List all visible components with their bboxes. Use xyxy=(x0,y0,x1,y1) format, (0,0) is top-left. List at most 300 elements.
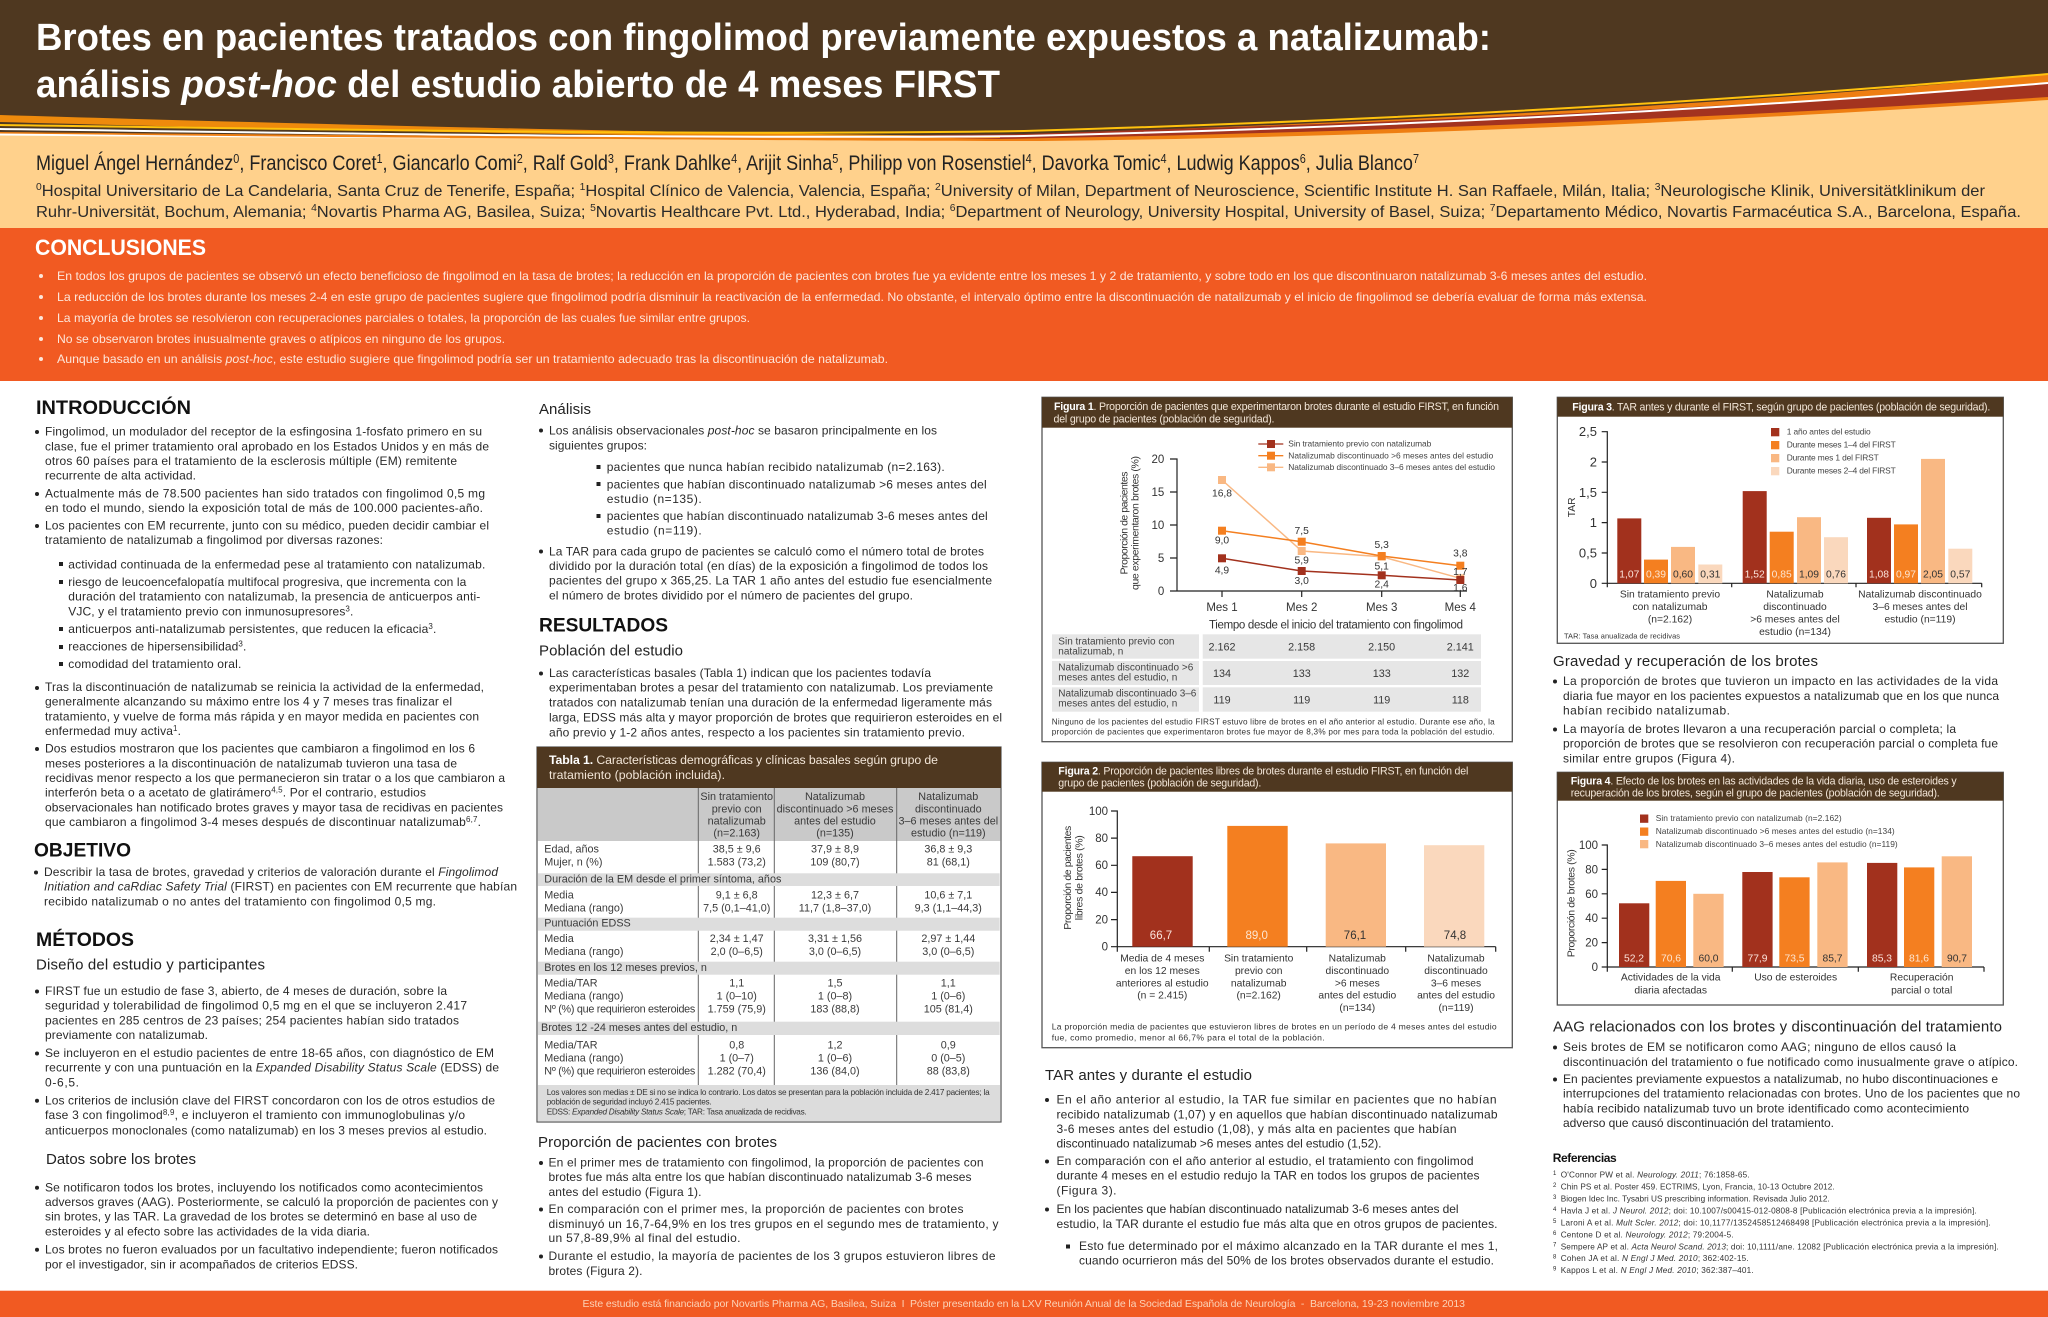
table 1 values: 183 (88,8) xyxy=(810,1004,860,1016)
references list: 5 xyxy=(1553,1219,1557,1225)
figure 3 bars: 1,52 xyxy=(1745,569,1765,580)
table 1 values: 0,8 xyxy=(729,1040,744,1052)
figure 1 footnote: proporción de pacientes que experimentaron brotes fue mayor de 8,3% por mes para toda la población del estudio. xyxy=(1052,728,1495,737)
figure 4 bars xyxy=(1619,856,1972,967)
table 1 row labels xyxy=(544,844,696,1078)
proporción text: brotes fue más alta entre los que habían discontinuado natalizumab 3-6 meses xyxy=(548,1170,972,1184)
table 1 section bands xyxy=(538,873,1000,1035)
diseño text: pacientes en 285 centros de 23 países; 254 pacientes habían sido tratados xyxy=(45,1013,459,1027)
figure 2 bars: 66,7 xyxy=(1150,930,1172,942)
figure 3 axes: 2,5 xyxy=(1579,424,1597,439)
table 1 row labels: Mediana (rango) xyxy=(544,1053,624,1065)
figure 1 patient table: 119 xyxy=(1373,694,1390,706)
datos text: Los brotes no fueron evaluados por un facultativo independiente; fueron notificados xyxy=(45,1242,498,1256)
table 1 values: 10,6 ± 7,1 xyxy=(924,889,972,901)
introducción text: recurrente de alta actividad. xyxy=(45,469,196,483)
figure 2 category labels: Media de 4 meses xyxy=(1120,953,1204,964)
panel: resultados, población del estudio xyxy=(539,614,1002,739)
data labels: 16,8 xyxy=(1212,489,1232,500)
conclusiones heading: CONCLUSIONES xyxy=(35,235,206,260)
figure 3 bars: 1,08 xyxy=(1869,569,1889,580)
references list xyxy=(1553,1171,1999,1275)
table 1 footnote: Los valores son medias ± DE si no se indica lo contrario. Los datos se presentan para la población incluida de 2.417 pacientes; la xyxy=(547,1088,990,1097)
data labels: 2,4 xyxy=(1375,580,1389,591)
gravedad text: La proporción de brotes que tuvieron un impacto en las actividades de la vida xyxy=(1563,674,1998,688)
análisis text xyxy=(539,423,992,602)
introducción text: generalmente alcanzando su máximo entre los 4 y 7 meses tras finalizar el xyxy=(45,695,452,709)
figure 4 category labels: parcial o total xyxy=(1891,985,1952,996)
figure 3 bars: 0,97 xyxy=(1896,569,1916,580)
table 1 values: 38,5 ± 9,6 xyxy=(713,844,761,856)
references heading: Referencias xyxy=(1553,1151,1617,1165)
figure 4 bar chart xyxy=(1565,813,1984,996)
figure 1 patient table: meses antes del estudio, n xyxy=(1058,699,1177,710)
figure 3 panel xyxy=(1557,397,2003,643)
subheading: proporción: Proporción de pacientes con brotes xyxy=(538,1134,777,1151)
introducción text: tratamiento de natalizumab a fingolimod por diversas razones: xyxy=(45,533,383,547)
table 1 values: 1,1 xyxy=(941,978,956,990)
figure 4 bars: 60,0 xyxy=(1698,954,1719,965)
panel: gravedad y recuperación xyxy=(1553,653,1999,765)
table 1 values: 1 (0–7) xyxy=(720,1053,754,1065)
table 1 values: 11,7 (1,8–37,0) xyxy=(799,902,871,914)
figure 4 legend: Natalizumab discontinuado 3–6 meses antes del estudio (n=119) xyxy=(1656,839,1898,849)
diseño text: recurrente y con una puntuación en la Expanded Disability Status Scale (EDSS) de xyxy=(45,1061,499,1075)
figure 3 category labels: estudio (n=119) xyxy=(1884,614,1956,625)
figure 3 bars: 0,60 xyxy=(1673,569,1693,580)
figure 3 category labels: discontinuado xyxy=(1763,602,1827,613)
table 1 column headers: (n=2.163) xyxy=(713,828,760,840)
diseño text: fase 3 con fingolimod8,9, e incluyeron el tramiento con immunoglobulinas y/o xyxy=(45,1108,465,1122)
references list: 2 xyxy=(1553,1183,1557,1189)
heading: resultados: RESULTADOS xyxy=(539,614,668,636)
table 1 values: 136 (84,0) xyxy=(810,1066,860,1078)
datos text: esteroides y al efecto sobre las actividades de la vida diaria. xyxy=(45,1224,370,1238)
figure 3 legend: Durante meses 1–4 del FIRST xyxy=(1787,440,1896,450)
figure 4 title: Figura 4. Efecto de los brotes en las actividades de la vida diaria, uso de esteroides y xyxy=(1571,775,1957,787)
figure 1 patient table: 2.158 xyxy=(1288,642,1315,654)
figure 1 axes: Mes 2 xyxy=(1286,602,1317,614)
heading: objetivo: OBJETIVO xyxy=(34,840,131,862)
figure 1 patient table: Sin tratamiento previo con xyxy=(1058,636,1174,647)
figure 2 bar chart xyxy=(1062,806,1496,1014)
table 1 values: 1.583 (73,2) xyxy=(708,857,766,869)
figure 1 patient table: Natalizumab discontinuado >6 xyxy=(1058,663,1194,674)
figure 3 legend: 1 año antes del estudio xyxy=(1787,427,1871,437)
introducción text: en todo el mundo, siendo la exposición total de más de 100.000 pacientes-año. xyxy=(45,501,483,515)
table 1 column headers: Natalizumab xyxy=(918,791,978,803)
figure 4 category labels: diaria afectadas xyxy=(1634,985,1707,996)
aag text: discontinuación del tratamiento o fue notificado como inusualmente grave o atípico. xyxy=(1563,1055,2018,1069)
figure 3 bar chart xyxy=(1564,424,1982,640)
table 1 values: 0 (0–5) xyxy=(931,1053,965,1065)
población text: experimentaban brotes a pesar del tratamiento con natalizumab. Los previamente xyxy=(549,681,993,695)
table 1 values: 109 (80,7) xyxy=(810,857,860,869)
tar text: cuando ocurrieron más del 50% de los brotes observados durante el estudio. xyxy=(1079,1254,1494,1268)
figure 3 axes: 2 xyxy=(1590,454,1597,470)
introducción text: clase, fue el primer tratamiento oral aprobado en los Estados Unidos y en más de xyxy=(45,439,489,453)
table 1 values: 9,3 (1,1–44,3) xyxy=(915,902,982,914)
table 1 column headers: (n=135) xyxy=(816,828,854,840)
tar text: discontinuado natalizumab >6 meses antes del estudio (1,52). xyxy=(1056,1137,1382,1151)
figure 2 axes: libres de brotes (%) xyxy=(1073,835,1085,920)
diseño text: previamente con natalizumab. xyxy=(45,1028,208,1042)
datos text: sin brotes, y las TAR. La gravedad de los brotes se determinó en base al uso de xyxy=(45,1210,477,1224)
análisis text: pacientes que habían discontinuado natalizumab >6 meses antes del xyxy=(607,477,987,491)
table 1 row labels: Media xyxy=(544,933,574,945)
diseño text: FIRST fue un estudio de fase 3, abierto, de 4 meses de duración, sobre la xyxy=(45,984,447,998)
análisis text: pacientes que nunca habían recibido natalizumab (n=2.163). xyxy=(607,460,945,474)
table 1 values: 3,0 (0–6,5) xyxy=(922,946,974,958)
data labels: 3,0 xyxy=(1295,576,1309,587)
figure 1 panel xyxy=(1042,397,1512,742)
figure 1 footnote xyxy=(1052,717,1495,737)
figure 3 bars: 0,76 xyxy=(1826,569,1846,580)
figure 4 legend: Natalizumab discontinuado >6 meses antes del estudio (n=134) xyxy=(1656,826,1895,836)
análisis text: pacientes del grupo x 365,25. La TAR 1 año antes del estudio fue esencialmente xyxy=(549,574,992,588)
tar text: En el año anterior al estudio, la TAR fue similar en pacientes que no habían xyxy=(1056,1093,1496,1107)
diseño text: 0-6,5. xyxy=(45,1075,79,1089)
panel: introducción xyxy=(35,395,505,829)
table 1 values: 2,0 (0–6,5) xyxy=(711,946,763,958)
figure 2 bars: 74,8 xyxy=(1444,930,1466,942)
figure 2 category labels: en los 12 meses xyxy=(1125,966,1200,977)
references list: 6 xyxy=(1553,1231,1557,1237)
conclusiones bullet list: La mayoría de brotes se resolvieron con recuperaciones parciales o totales, la proporción de las cuales fue similar entre grupos. xyxy=(57,311,750,325)
introducción text: tratamiento, y vuelve de forma más rápida y en mayor medida en pacientes con xyxy=(45,709,479,723)
introducción text: reacciones de hipersensibilidad3. xyxy=(68,639,246,653)
figure 3 bars: 1,09 xyxy=(1799,569,1819,580)
table 1 values: 105 (81,4) xyxy=(924,1004,973,1016)
tar text: 3-6 meses antes del estudio (1,08), y más alta en pacientes que habían xyxy=(1056,1122,1456,1136)
table 1 column headers: 3–6 meses antes del xyxy=(898,816,998,828)
figure 2 bars: 89,0 xyxy=(1246,930,1268,942)
figure 3 bars: 0,57 xyxy=(1950,569,1971,580)
figure 2 category labels: natalizumab xyxy=(1231,978,1287,989)
figure 4 axes: Proporción de brotes (%) xyxy=(1565,849,1577,957)
figure 2 axes: 20 xyxy=(1095,914,1108,926)
figure 1 axes: Mes 3 xyxy=(1366,602,1397,614)
table 1 title: Tabla 1. Características demográficas y clínicas basales según grupo de xyxy=(549,753,938,767)
figure 4 category labels: Recuperación xyxy=(1890,973,1954,984)
población text: Las características basales (Tabla 1) indican que los pacientes todavía xyxy=(549,666,931,680)
table 1 values: 37,9 ± 8,9 xyxy=(811,844,859,856)
table 1 values: 88 (83,8) xyxy=(927,1066,970,1078)
table 1 title xyxy=(549,753,938,782)
análisis text: pacientes que habían discontinuado natalizumab 3-6 meses antes del xyxy=(607,509,988,523)
figure 2 title: Figura 2. Proporción de pacientes libres de brotes durante el estudio FIRST, en función del xyxy=(1058,765,1468,777)
table 1 values: 1.759 (75,9) xyxy=(708,1004,766,1016)
data labels: 5,3 xyxy=(1375,540,1389,551)
introducción text: que cambiaron a fingolimod 3-4 meses después de discontinuar natalizumab6,7. xyxy=(45,815,481,829)
figure 4 category labels: Uso de esteroides xyxy=(1754,973,1837,984)
análisis text: La TAR para cada grupo de pacientes se calculó como el número total de brotes xyxy=(549,544,984,558)
table 1 section bands: Brotes en los 12 meses previos, n xyxy=(544,962,707,974)
proporción text: antes del estudio (Figura 1). xyxy=(548,1185,702,1199)
datos text: por el investigador, sin ir acompañados de criterios EDSS. xyxy=(45,1257,358,1271)
conclusiones bullet list: Aunque basado en un análisis post-hoc, este estudio sugiere que fingolimod podría ser un tratamiento adecuado tras la discontinuación de natalizumab. xyxy=(57,352,888,366)
figure 3 axes: 0,5 xyxy=(1579,546,1597,560)
table 1 values: 1 (0–6) xyxy=(818,1053,852,1065)
table 1 row labels: Edad, años xyxy=(544,844,600,856)
introducción text: recidivas menor respecto a los que permanecieron sin tratar o a los que cambiaron a xyxy=(45,771,505,785)
title xyxy=(36,17,1491,106)
proporción text xyxy=(539,1156,998,1278)
figure 1 title xyxy=(1054,401,1499,425)
authors: Miguel Ángel Hernández0, Francisco Coret1, Giancarlo Comi2, Ralf Gold3, Frank Dahlke4, Arijit Sinha5, Philipp von Rosenstiel4, Davorka Tomic4, Ludwig Kappos6, Julia Blanco7 xyxy=(36,150,1419,175)
gravedad text: similar entre grupos (Figura 4). xyxy=(1563,751,1735,765)
objetivo text: Initiation and caRdiac Safety Trial (FIRST) en pacientes con EM recurrente que habían xyxy=(44,880,517,894)
objetivo text xyxy=(34,865,517,908)
table 1 footnote xyxy=(538,1085,1000,1121)
footer band xyxy=(0,1291,2048,1317)
subheading: diseño del estudio: Diseño del estudio y participantes xyxy=(36,956,265,973)
table 1 values: 1.282 (70,4) xyxy=(708,1066,766,1078)
data labels: 3,8 xyxy=(1453,549,1468,560)
table 1 values: 1 (0–6) xyxy=(931,991,965,1003)
proporción text: En el primer mes de tratamiento con fingolimod, la proporción de pacientes con xyxy=(548,1156,984,1170)
footer text: Este estudio está financiado por Novartis Pharma AG, Basilea, Suiza I Póster presentado en la LXV Reunión Anual de la Sociedad Española de Neurología - Barcelona, 19-23 noviembre 2013 xyxy=(582,1298,1465,1310)
table 1 column headers: previo con xyxy=(712,803,762,815)
figure 3 category labels: Natalizumab discontinuado xyxy=(1858,589,1982,600)
población text: larga, EDSS más alta y mayor proporción de brotes que requirieron esteroides en el xyxy=(549,710,1002,724)
series: sin tratamiento previo xyxy=(1218,554,1464,584)
figure 1 legend: Sin tratamiento previo con natalizumab xyxy=(1288,439,1432,449)
figure 2 axes: 40 xyxy=(1095,887,1108,899)
figure 1 axes: 15 xyxy=(1152,487,1164,499)
conclusiones bullet list: No se observaron brotes inusualmente graves o atípicos en ninguno de los grupos. xyxy=(57,332,505,346)
figure 4 title xyxy=(1571,775,1957,800)
figure 4 axes: 80 xyxy=(1585,864,1598,876)
series: discontinuado más de 6 meses xyxy=(1218,527,1464,570)
introducción text: meses posteriores a la discontinuación de natalizumab tuvieron una tasa de xyxy=(45,756,457,770)
table 1 values xyxy=(703,844,982,1078)
aag text: había recibido natalizumab tuvo un brote identificado como acontecimiento xyxy=(1563,1101,1969,1115)
introducción text: observacionales han notificado brotes graves y mayor tasa de recidivas en pacientes xyxy=(45,800,503,814)
figure 3 axes: 1 xyxy=(1590,515,1597,530)
figure 2 footnote xyxy=(1052,1022,1497,1043)
figure 2 category labels: Natalizumab xyxy=(1427,953,1485,964)
table 1 column headers: Sin tratamiento xyxy=(700,791,773,803)
figure 2 category labels: antes del estudio xyxy=(1417,991,1495,1002)
introducción text: duración del tratamiento con natalizumab, la presencia de anticuerpos anti- xyxy=(68,590,480,604)
figure 1 patient table: 119 xyxy=(1293,694,1310,706)
table 1 values: 3,31 ± 1,56 xyxy=(808,933,862,945)
figure 3 bars: 0,85 xyxy=(1772,569,1792,580)
figure 3 category labels: (n=2.162) xyxy=(1648,614,1692,625)
figure 3 category labels: Natalizumab xyxy=(1766,589,1824,600)
análisis text: estudio (n=135). xyxy=(607,492,702,506)
table 1 row labels: Media/TAR xyxy=(544,978,598,990)
table 1 column headers: Natalizumab xyxy=(805,791,865,803)
población text: tratados con natalizumab tenían una duración de la enfermedad ligeramente más xyxy=(549,696,992,710)
figure 2 panel xyxy=(1042,762,1512,1048)
figure 1 patient table: 2.162 xyxy=(1208,642,1236,654)
figure 1 patient table: Natalizumab discontinuado 3–6 xyxy=(1058,689,1197,700)
data labels: 7,5 xyxy=(1295,526,1309,537)
figure 1 axes: Mes 4 xyxy=(1445,602,1477,614)
table 1 row labels: Media/TAR xyxy=(544,1040,598,1052)
introducción text: Tras la discontinuación de natalizumab se reinicia la actividad de la enfermedad, xyxy=(45,680,484,694)
introducción text: enfermedad muy activa1. xyxy=(45,724,181,738)
figure 1 legend: Natalizumab discontinuado 3–6 meses antes del estudio xyxy=(1288,462,1495,472)
figure 1 axes xyxy=(1119,454,1477,632)
diseño text: Los criterios de inclusión clave del FIRST concordaron con los de otros estudios de xyxy=(45,1093,495,1107)
figure 4 bars: 77,9 xyxy=(1747,954,1768,965)
proporción text: un 57,8-89,9% al final del estudio. xyxy=(548,1231,740,1245)
table 1 section bands: Brotes 12 -24 meses antes del estudio, n xyxy=(541,1022,737,1034)
panel: conclusiones xyxy=(0,228,2048,381)
introducción text: otros 60 países para el tratamiento de la esclerosis múltiple (EM) remitente xyxy=(45,454,457,468)
table 1 column headers: natalizumab xyxy=(708,816,766,828)
diseño text: Se incluyeron en el estudio pacientes de entre 18-65 años, con diagnóstico de EM xyxy=(45,1046,494,1060)
table 1 title: tratamiento (población incluida). xyxy=(549,768,725,782)
figure 3 bars: 2,05 xyxy=(1923,569,1943,580)
table 1 row labels: Mediana (rango) xyxy=(544,991,624,1003)
diseño text: seguridad y tolerabilidad de fingolimod 0,5 mg en el que se incluyeron 2.417 xyxy=(45,999,467,1013)
conclusiones bullet list xyxy=(39,269,1647,366)
figure 2 bars xyxy=(1132,826,1484,947)
panel: aag xyxy=(1553,1018,2020,1130)
references list: Centone D et al. Neurology. 2012; 79:2004-5. xyxy=(1561,1231,1734,1240)
figure 3 bars: 1,07 xyxy=(1619,569,1640,580)
figure 3 category labels xyxy=(1620,589,1982,638)
data labels: 1,6 xyxy=(1453,583,1468,594)
data labels: 4,9 xyxy=(1215,565,1229,576)
figure 3 axes: 1,5 xyxy=(1579,485,1597,500)
figure 1 footnote: Ninguno de los pacientes del estudio FIRST estuvo libre de brotes en el año anterior al estudio. Durante ese año, la xyxy=(1052,717,1495,726)
conclusiones bullet list: En todos los grupos de pacientes se observó un efecto beneficioso de fingolimod en la tasa de brotes; la reducción en la proporción de pacientes con brotes fue ya evidente entre los meses 1 y 2 de tratamiento, y sobre todo en los que discontinuaron natalizumab 3-6 meses antes del estudio. xyxy=(57,269,1647,283)
figure 3 bars: 0,39 xyxy=(1646,569,1666,580)
análisis text: dividido por la duración total (en días) de la exposición a fingolimod de todos los xyxy=(549,559,988,573)
aag text: En pacientes previamente expuestos a natalizumab, no hubo discontinuaciones e xyxy=(1563,1072,1998,1086)
figure 1 patient table: meses antes del estudio, n xyxy=(1058,673,1177,684)
gravedad text xyxy=(1553,674,1999,765)
table 1 values: 12,3 ± 6,7 xyxy=(811,889,859,901)
figure 2 title xyxy=(1058,765,1468,790)
gravedad text: diaria fue mayor en los pacientes expuestos a natalizumab que en los que nunca xyxy=(1563,689,1999,703)
subheading: tar: TAR antes y durante el estudio xyxy=(1045,1067,1252,1084)
affiliations xyxy=(36,182,2021,221)
table 1 column headers: discontinuado xyxy=(915,803,982,815)
figure 4 axes: 100 xyxy=(1579,840,1598,852)
figure 1 axes: 0 xyxy=(1158,586,1164,598)
gravedad text: La mayoría de brotes llevaron a una recuperación parcial o completa; la xyxy=(1563,722,1956,736)
tar text: En comparación con el año anterior al estudio, el tratamiento con fingolimod xyxy=(1056,1154,1474,1168)
tar text: Esto fue determinado por el máximo alcanzado en la TAR durante el mes 1, xyxy=(1079,1239,1498,1253)
tar text: En los pacientes que habían discontinuado natalizumab 3-6 meses antes del xyxy=(1056,1202,1458,1216)
figure 3 axes xyxy=(1567,424,1982,591)
references list: Havla J et al. J Neurol. 2012; doi: 10.1007/s00415-012-0808-8 [Publicación electrónica previa a la impresión]. xyxy=(1561,1207,1977,1216)
data labels: 5,1 xyxy=(1375,561,1389,572)
references list: Chin PS et al. Poster 459. ECTRIMS, Lyon, Francia, 10-13 Octubre 2012. xyxy=(1561,1183,1835,1192)
panel: objetivo xyxy=(34,840,517,908)
introducción text: anticuerpos anti-natalizumab persistentes, que reducen la eficacia3. xyxy=(68,622,436,636)
introducción text: Los pacientes con EM recurrente, junto con su médico, pueden decidir cambiar el xyxy=(45,518,489,532)
figure 4 bars: 73,5 xyxy=(1784,954,1805,965)
figure 1 axes: 20 xyxy=(1152,454,1164,466)
datos text xyxy=(35,1180,498,1271)
figure 4 panel xyxy=(1557,772,2003,1005)
figure 4 bars: 81,6 xyxy=(1909,954,1929,965)
table 1 column headers xyxy=(538,788,1000,841)
análisis text: el número de brotes dividido por el número de pacientes del grupo. xyxy=(549,588,913,602)
panel: tar antes y durante el estudio xyxy=(1045,1067,1498,1268)
figure 4 axes: 40 xyxy=(1585,913,1598,925)
references list: 9 xyxy=(1553,1266,1557,1272)
references list: 3 xyxy=(1553,1195,1557,1201)
figure 2 category labels: anteriores al estudio xyxy=(1116,978,1209,989)
table 1 footnote: población de seguridad incluyó 2.415 pacientes. xyxy=(547,1097,712,1106)
subheading: análisis: Análisis xyxy=(539,401,591,418)
panel: análisis xyxy=(539,401,992,602)
introducción text: actividad continuada de la enfermedad pese al tratamiento con natalizumab. xyxy=(68,557,485,571)
aag text: Seis brotes de EM se notificaron como AAG; ninguno de ellos causó la xyxy=(1563,1040,1956,1054)
subheading: población del estudio: Población del estudio xyxy=(539,642,683,659)
references xyxy=(1553,1151,1999,1275)
introducción text: VJC, y el tratamiento previo con inmunosupresores3. xyxy=(68,604,353,618)
header banner with swoosh xyxy=(0,0,2048,228)
figure 4 legend: Sin tratamiento previo con natalizumab (n=2.162) xyxy=(1656,813,1842,823)
figure 1 title: Figura 1. Proporción de pacientes que experimentaron brotes durante el estudio FIRST, en función xyxy=(1054,401,1499,413)
references list: Cohen JA et al. N Engl J Med. 2010; 362:402-15. xyxy=(1561,1254,1749,1263)
figure 1 legend xyxy=(1258,439,1495,472)
figure 1 legend: Natalizumab discontinuado >6 meses antes del estudio xyxy=(1288,450,1494,460)
figure 2 category labels: discontinuado xyxy=(1326,966,1389,977)
table 1 footnote: EDSS: Expanded Disability Status Scale; TAR: Tasa anualizada de recidivas. xyxy=(547,1107,807,1116)
figure 1 patient table: 133 xyxy=(1373,668,1391,680)
figure 3 category labels: con natalizumab xyxy=(1633,602,1708,613)
figure 3 note: TAR: Tasa anualizada de recidivas xyxy=(1564,631,1680,640)
table 1 values: 1,2 xyxy=(827,1040,843,1052)
figure 2 category labels: Natalizumab xyxy=(1329,953,1386,964)
table 1 row labels: Media xyxy=(544,889,574,901)
figure 1 patient table: 2.150 xyxy=(1368,642,1395,654)
tar text: (Figura 3). xyxy=(1056,1183,1116,1197)
tar text: estudio, la TAR durante el estudio fue más alta que en otros grupos de pacientes. xyxy=(1056,1217,1498,1231)
figure 1 patient table: 118 xyxy=(1452,694,1469,706)
subheading: aag: AAG relacionados con los brotes y discontinuación del tratamiento xyxy=(1553,1018,2002,1036)
análisis text: Los análisis observacionales post-hoc se basaron principalmente en los xyxy=(549,423,937,437)
table 1 values: 2,34 ± 1,47 xyxy=(710,933,764,945)
aag text: interrupciones del tratamiento relacionadas con brotes. Uno de los pacientes que no xyxy=(1563,1087,2020,1101)
figure 3 title: Figura 3. TAR antes y durante el FIRST, según grupo de pacientes (población de seguridad). xyxy=(1572,402,1990,414)
figure 2 axes: Proporción de pacientes xyxy=(1062,826,1074,930)
figure 2 footnote: fue, como promedio, menor al 66,7% para el total de la población. xyxy=(1052,1033,1325,1043)
table 1 column headers: discontinuado >6 meses xyxy=(777,803,894,815)
table 1 row labels: Mediana (rango) xyxy=(544,946,624,958)
figure 1 axes: Tiempo desde el inicio del tratamiento con fingolimod xyxy=(1209,620,1463,632)
heading: introducción: INTRODUCCIÓN xyxy=(36,395,191,419)
tar text: durante 4 meses en el estudio redujo la TAR en todos los grupos de pacientes xyxy=(1056,1169,1480,1183)
figure 2 axes xyxy=(1062,806,1496,954)
objetivo text: Describir la tasa de brotes, gravedad y criterios de valoración durante el Fingolimod xyxy=(44,865,498,879)
figure 3 category labels: Sin tratamiento previo xyxy=(1620,589,1720,600)
heading: métodos: MÉTODOS xyxy=(36,928,134,951)
conclusiones bullet list: La reducción de los brotes durante los meses 2-4 en este grupo de pacientes sugiere que fingolimod podría disminuir la reactivación de la enfermedad. No obstante, el intervalo óptimo entre la discontinuación de natalizumab y el inicio de fingolimod se debería evaluar de forma más extensa. xyxy=(57,290,1647,304)
figure 3 legend: Durante meses 2–4 del FIRST xyxy=(1787,466,1896,476)
aag text xyxy=(1553,1040,2020,1130)
references list: Sempere AP et al. Acta Neurol Scand. 2013; doi: 10,1111/ane. 12082 [Publicación electrónica previa a la impresión]. xyxy=(1561,1242,1999,1251)
figure 3 category labels: >6 meses antes del xyxy=(1750,614,1840,625)
figure 2 category labels: (n=134) xyxy=(1339,1003,1375,1014)
objetivo text: recibido natalizumab o no antes del tratamiento con fingolimod 0,5 mg. xyxy=(44,894,436,908)
figure 4 bars: 70,6 xyxy=(1661,954,1681,965)
series: discontinuado 3-6 meses xyxy=(1218,476,1464,582)
figure 4 axes: 20 xyxy=(1585,938,1598,950)
figure 2 category labels: previo con xyxy=(1235,966,1283,977)
table 1 values: 1 (0–10) xyxy=(717,991,757,1003)
